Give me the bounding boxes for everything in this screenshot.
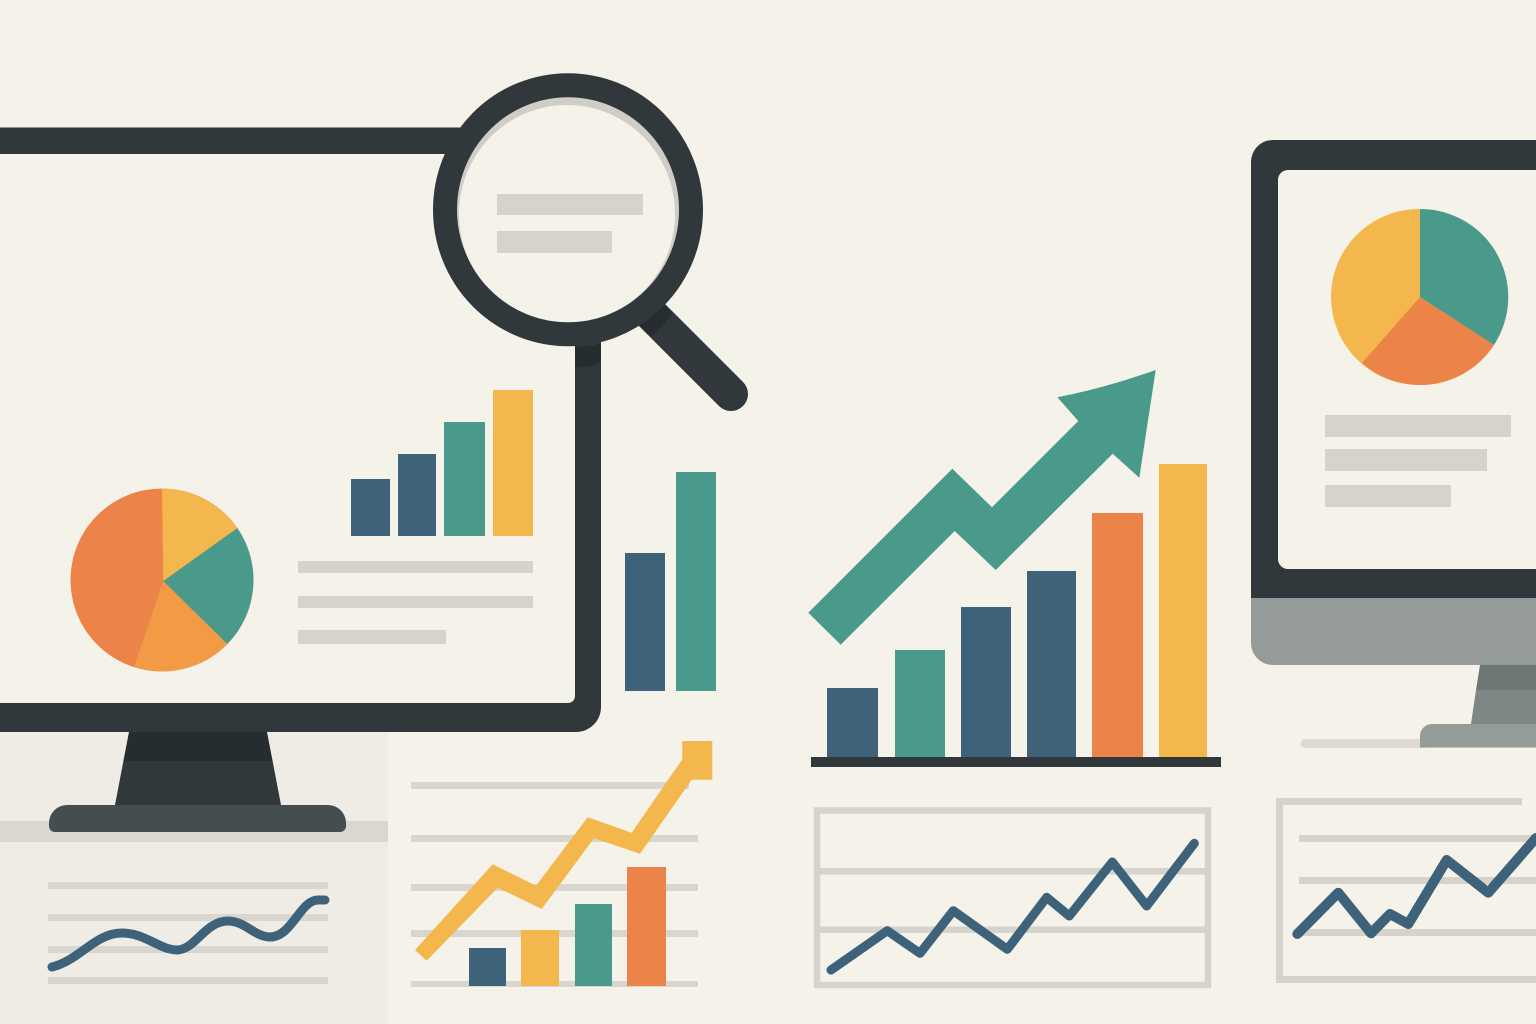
- text placeholder lines: left monitor: [298, 561, 533, 644]
- text placeholder lines: right monitor: [1325, 415, 1511, 507]
- pie chart: right monitor: [1331, 209, 1508, 385]
- monitor frame: [0, 128, 601, 732]
- arrow: green growth arrow: [808, 370, 1156, 645]
- bar chart: left monitor: [351, 390, 533, 536]
- monitor base: [49, 805, 346, 832]
- bar chart: central rising bars: [811, 464, 1221, 767]
- pie chart: left monitor: [70, 488, 254, 672]
- line chart: central framed chart: [816, 810, 1208, 985]
- bar chart: standalone two bars: [625, 472, 716, 691]
- panel: shaded desk area under left monitor: [0, 732, 388, 1024]
- monitor base: [1420, 724, 1536, 748]
- monitor screen: [1278, 170, 1536, 569]
- handle: [635, 298, 731, 394]
- shadow of rim on monitor frame: [575, 343, 601, 367]
- lens with crescent shadow: [456, 96, 680, 323]
- monitor stand: [115, 732, 281, 805]
- text placeholder lines in lens: [497, 194, 643, 253]
- magnifying glass: [445, 85, 731, 394]
- line chart: wavy trend under left monitor: [48, 882, 328, 984]
- monitor stand: [1471, 665, 1536, 724]
- monitor: right monitor: [1251, 140, 1536, 748]
- line chart: right framed chart: [1280, 802, 1536, 980]
- combo chart: yellow trend with bars: [411, 741, 712, 987]
- monitor frame: [1251, 140, 1536, 598]
- rim: [445, 85, 691, 334]
- monitor chin: [1251, 598, 1536, 665]
- monitor shadow line: [1300, 739, 1430, 748]
- monitor: large left monitor: [0, 128, 601, 832]
